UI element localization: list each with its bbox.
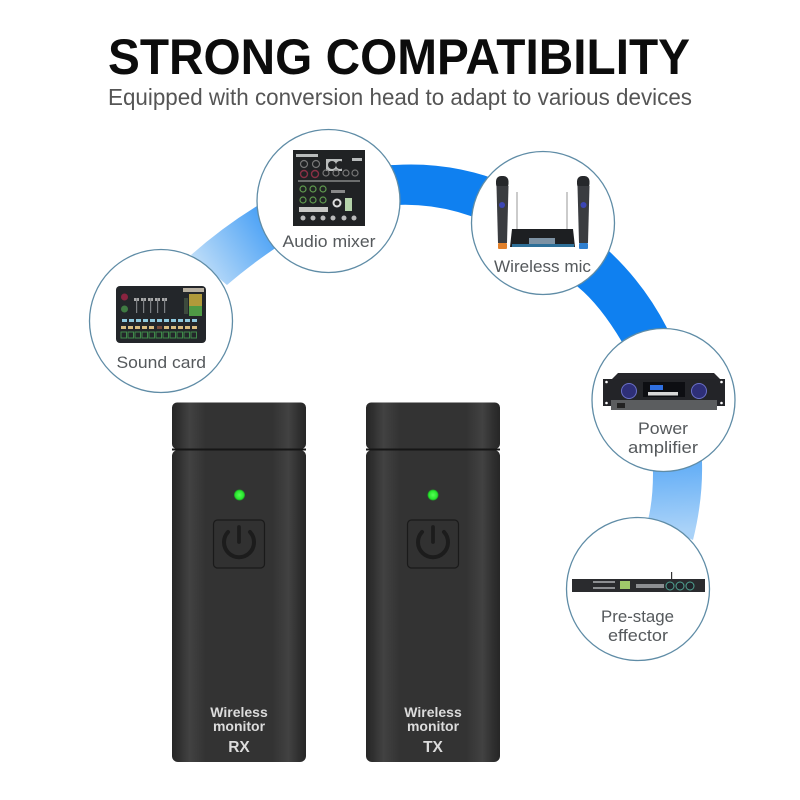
connecting arc band xyxy=(191,165,702,540)
label: pre-stage effector xyxy=(601,607,674,645)
title: STRONG COMPATIBILITY xyxy=(108,29,690,85)
icon: pre-stage effector device xyxy=(572,572,705,592)
device top cap xyxy=(366,402,500,449)
label: pre-stage effector: effector xyxy=(608,626,668,645)
icon: sound card device xyxy=(116,286,206,343)
circle: power amplifier xyxy=(592,328,735,472)
device top cap xyxy=(172,402,306,449)
label: audio mixer: Audio mixer xyxy=(282,232,376,251)
status LED xyxy=(428,490,438,500)
label: power amplifier: Power xyxy=(638,419,688,438)
label: sound card: Sound card xyxy=(116,353,206,372)
device: RX wireless monitor xyxy=(172,402,306,762)
subtitle: Equipped with conversion head to adapt to various devices xyxy=(108,84,692,110)
icon: power amplifier device xyxy=(603,373,725,410)
device label xyxy=(404,704,462,756)
power button xyxy=(214,520,264,568)
icon: audio mixer device xyxy=(293,150,365,226)
circle: sound card xyxy=(90,250,232,392)
device label: Wireless xyxy=(210,704,268,720)
device label: monitor xyxy=(213,718,266,734)
device: TX wireless monitor xyxy=(366,402,500,762)
icon: wireless microphones and receiver xyxy=(496,176,590,249)
label: power amplifier xyxy=(628,419,698,457)
device label xyxy=(210,704,268,756)
label: wireless mic: Wireless mic xyxy=(494,257,591,276)
device label: monitor xyxy=(407,718,460,734)
status LED xyxy=(234,490,245,500)
power button xyxy=(408,520,458,568)
device label: TX xyxy=(423,739,444,756)
label: power amplifier: amplifier xyxy=(628,438,698,457)
device body xyxy=(366,450,500,762)
device label: Wireless xyxy=(404,704,462,720)
device body xyxy=(172,450,306,762)
circle: wireless mic xyxy=(472,152,614,294)
circle: audio mixer xyxy=(257,130,400,272)
label: pre-stage effector: Pre-stage xyxy=(601,607,674,626)
device label: RX xyxy=(228,739,250,756)
circle: pre-stage effector xyxy=(566,518,710,660)
